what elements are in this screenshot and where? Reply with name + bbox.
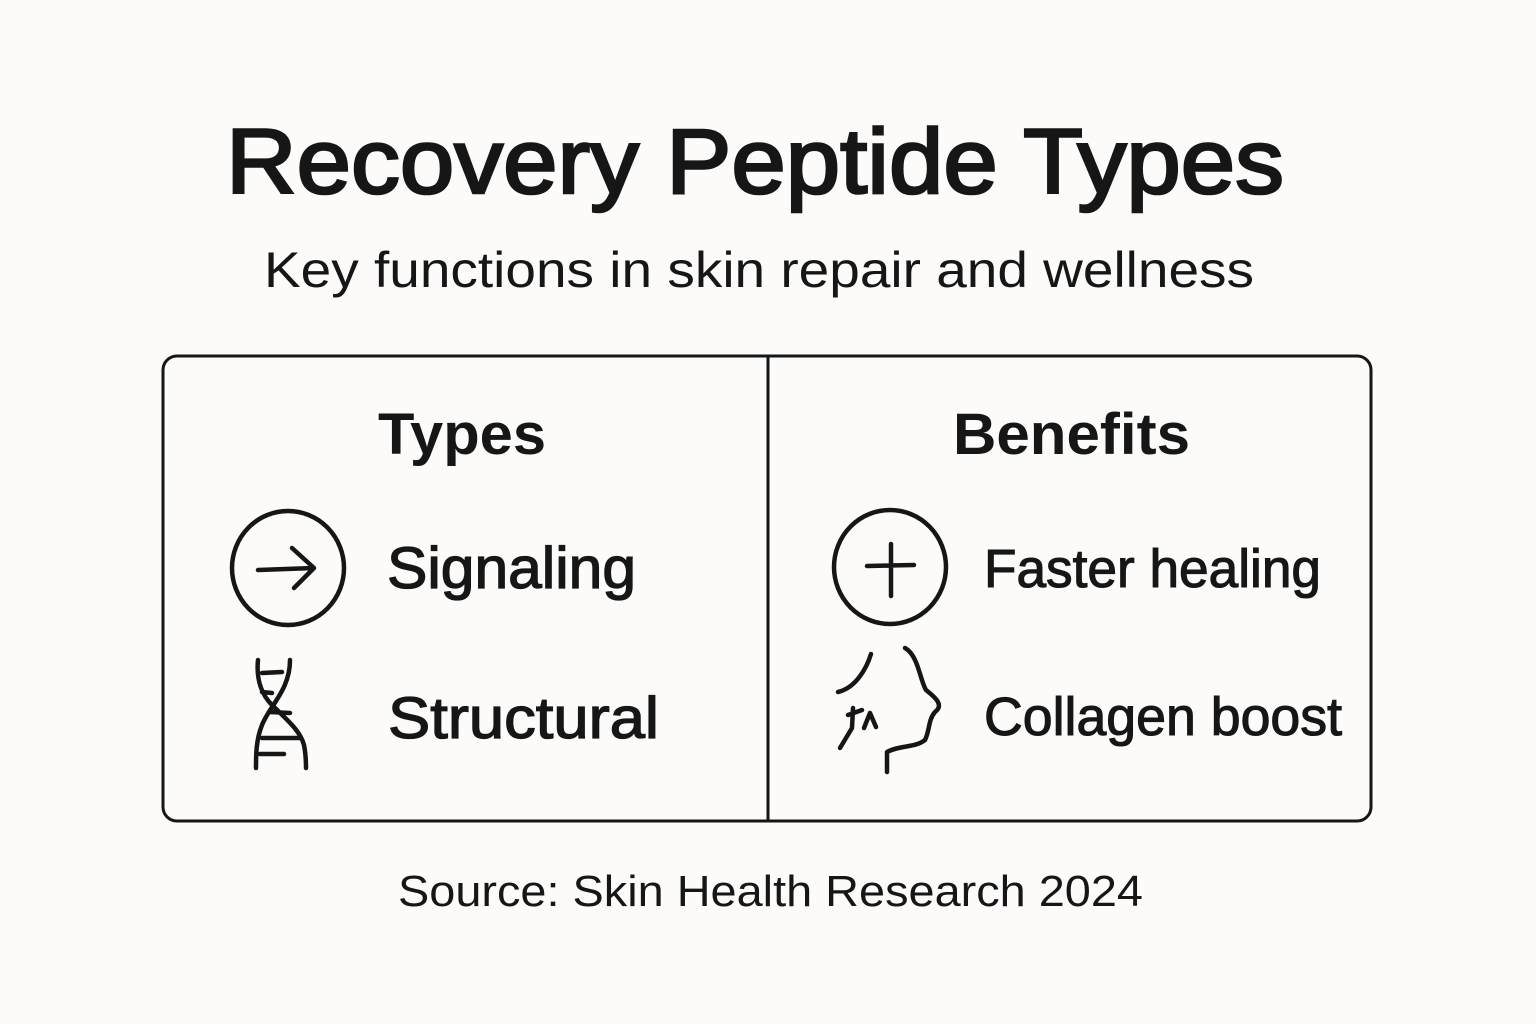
icon: face profile	[838, 648, 939, 772]
text: Signaling: Signaling	[387, 536, 636, 601]
icon: DNA	[256, 660, 306, 768]
panel: comparison box	[163, 356, 1371, 821]
icon: arrow circle	[232, 511, 344, 625]
text: Structural: Structural	[388, 686, 659, 751]
subtitle: Key functions in skin repair and wellness	[264, 242, 1254, 298]
title: Recovery Peptide Types	[226, 111, 1284, 213]
source: Source: Skin Health Research 2024	[398, 867, 1143, 916]
heading: Types: Types	[378, 402, 546, 467]
text: Collagen boost: Collagen boost	[984, 687, 1342, 747]
heading: Benefits: Benefits	[953, 402, 1190, 467]
icon: plus circle	[834, 510, 946, 624]
text: Faster healing: Faster healing	[984, 539, 1321, 599]
